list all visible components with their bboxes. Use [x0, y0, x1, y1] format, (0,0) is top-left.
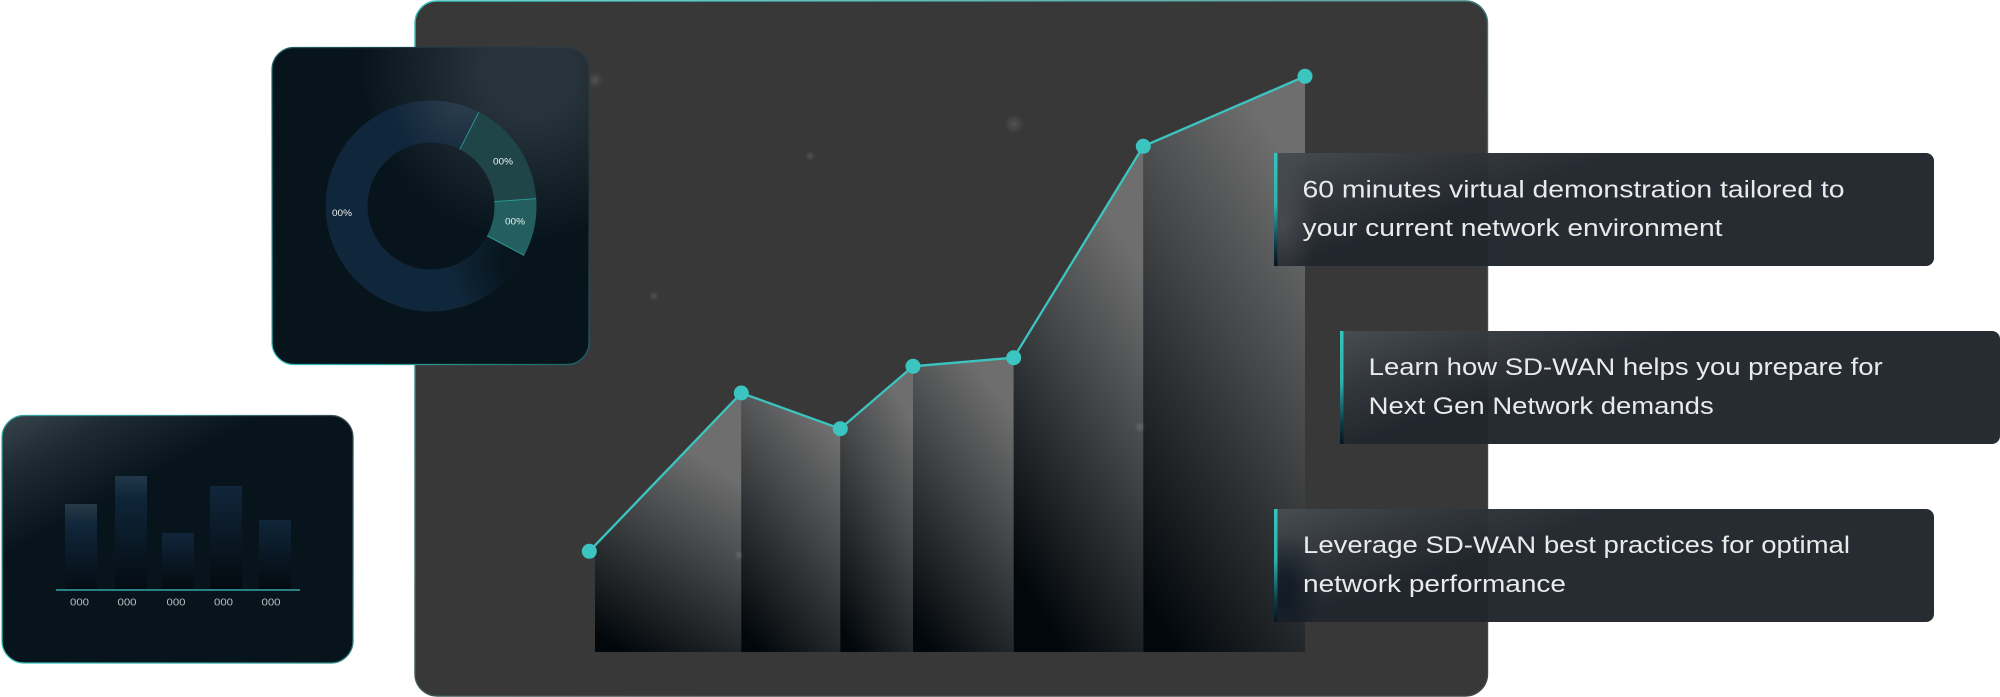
axis labels: 000: [262, 598, 281, 608]
chart column 1: [595, 393, 741, 652]
donut labels: [332, 157, 526, 228]
donut medium segment: [460, 112, 536, 202]
panel: bar chart card: [2, 416, 353, 663]
callout: Next Gen Network demands: [1340, 331, 2000, 444]
callout text: [1302, 176, 1844, 242]
axis line: [56, 589, 300, 591]
axis labels: 000: [118, 598, 137, 608]
callout text: Leverage SD-WAN best practices for optimal: [1303, 532, 1850, 559]
callout text: [1369, 354, 1883, 420]
callout text: [1303, 532, 1850, 598]
donut small segment: [487, 199, 536, 256]
bars: [65, 476, 291, 589]
panel: donut chart card: [272, 48, 589, 364]
area line chart: [582, 69, 1312, 652]
axis labels: 000: [70, 598, 89, 608]
axis labels: 000: [166, 598, 186, 608]
axis labels: [70, 598, 281, 608]
donut labels: 00%: [505, 217, 526, 228]
callout text: Next Gen Network demands: [1369, 393, 1714, 420]
chart column 5: [1014, 146, 1143, 652]
chart column 6: [1143, 76, 1305, 652]
chart column 2: [741, 393, 840, 652]
callout text: your current network environment: [1302, 215, 1723, 242]
callout text: Learn how SD-WAN helps you prepare for: [1369, 354, 1883, 381]
chart column 3: [840, 366, 913, 652]
trend line: [589, 76, 1305, 551]
donut large segment: [326, 101, 524, 312]
callout: best practices: [1274, 509, 1934, 622]
callout text: network performance: [1303, 571, 1566, 598]
chart column 4: [913, 358, 1014, 652]
callout text: 60 minutes virtual demonstration tailored to: [1302, 176, 1844, 203]
donut labels: 00%: [332, 208, 353, 219]
callout: 60 minutes demonstration: [1274, 153, 1934, 266]
axis labels: 000: [214, 598, 233, 608]
donut labels: 00%: [493, 157, 514, 168]
data points: [582, 69, 1312, 559]
panel: main chart background: [415, 1, 1488, 696]
decorative glow specks: [587, 72, 1146, 560]
